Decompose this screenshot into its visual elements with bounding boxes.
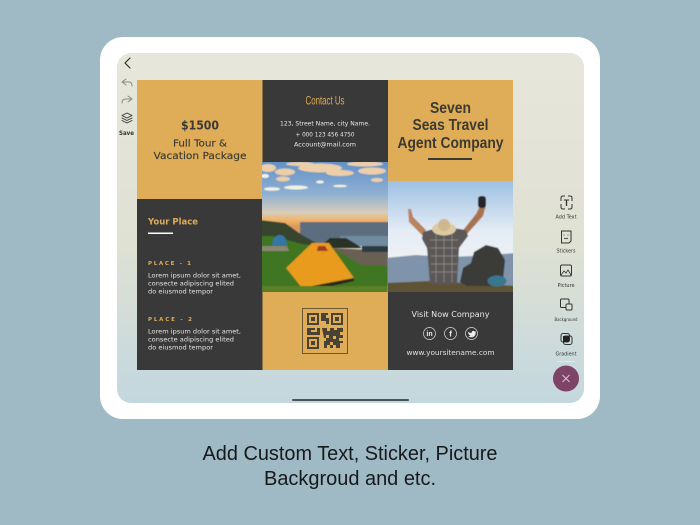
tool: gradient: [556, 334, 577, 358]
website: www.yoursitename.com: [406, 348, 494, 357]
tool: picture: Picture: [558, 283, 574, 289]
icon: save layers: [122, 113, 132, 123]
place 1: consecte adipiscing elited: [148, 280, 234, 288]
app screen: [117, 53, 584, 403]
infographic canvas: [100, 37, 600, 489]
tool: add text: [556, 196, 577, 220]
tool: add text: Add Text: [556, 214, 577, 220]
panel: price: Vacation Package: [154, 151, 246, 162]
place 2: do eiusmod tempor: [148, 344, 213, 352]
photo: traveller with raised arms: [386, 179, 516, 295]
label: save: Save: [119, 130, 134, 137]
caption: Backgroud and etc.: [264, 468, 436, 490]
title: Agent Company: [398, 135, 504, 152]
panel: your place: [137, 199, 262, 370]
title: Seas Travel: [412, 117, 488, 134]
tool: add text: T: [564, 198, 570, 208]
tool: stickers: [556, 231, 576, 254]
tool: background: Background: [554, 317, 578, 322]
panel: visit: [388, 292, 513, 370]
left toolbar: [122, 58, 132, 123]
tool: picture: [558, 265, 574, 289]
panel: visit: in: [426, 331, 433, 338]
QR pattern: [307, 313, 343, 349]
traveller: [408, 209, 426, 236]
panel: contact: [262, 80, 388, 162]
close button: [553, 366, 579, 392]
social icons: [424, 328, 478, 340]
price: $1500: [181, 118, 219, 132]
icon: undo: [122, 79, 132, 86]
tool: stickers: Stickers: [556, 248, 576, 254]
visit text: Visit Now Company: [412, 310, 490, 319]
photo: camping tent at sunset: [260, 160, 390, 294]
place 1: [148, 261, 241, 296]
panel: company title: [388, 80, 513, 181]
icon: redo: [122, 96, 132, 103]
brochure: [137, 80, 516, 370]
place 1: Lorem ipsum dolor sit amet,: [148, 272, 241, 280]
contact details: + 000 123 456 4750: [296, 132, 355, 138]
heading: Your Place: [147, 218, 198, 228]
tool: gradient: Gradient: [556, 352, 577, 358]
place 2: PLACE - 2: [148, 317, 192, 323]
panel: QR code: [262, 292, 388, 370]
caption: Add Custom Text, Sticker, Picture: [202, 443, 498, 465]
home indicator: [292, 399, 409, 401]
caption: [202, 443, 498, 490]
place 2: consecte adipiscing elited: [148, 336, 234, 344]
tablet frame: [100, 37, 600, 419]
icon: back: [125, 58, 130, 68]
right toolbar: [553, 196, 579, 392]
contact details: 123, Street Name, city Name.: [280, 120, 370, 128]
panel: visit: f: [449, 328, 452, 338]
place 2: [148, 317, 241, 352]
package text: Full Tour &: [173, 138, 227, 150]
contact details: Account@mail.com: [294, 140, 356, 148]
place 2: Lorem ipsum dolor sit amet,: [148, 328, 241, 336]
heading: Contact Us: [306, 94, 344, 108]
place 1: PLACE - 1: [148, 261, 191, 267]
place 1: do eiusmod tempor: [148, 288, 213, 296]
tool: background: [554, 299, 578, 322]
title: Seven: [430, 100, 471, 117]
panel: price: [137, 80, 262, 199]
